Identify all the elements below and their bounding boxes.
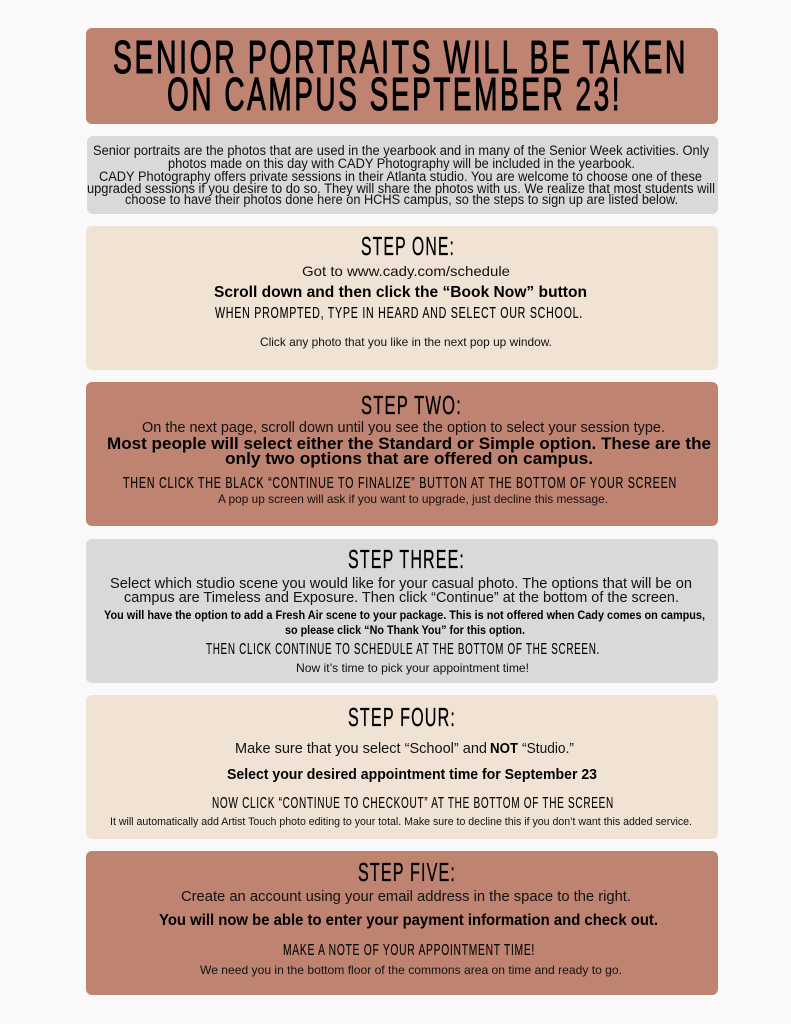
instruction: payment: You will now be able to enter your payment information and check out. [159,912,658,929]
intro text: photos made on this day with CADY Photography will be included in the yearbook. [168,156,635,171]
note: click photo: Click any photo that you like in the next pop up window. [260,335,552,349]
title banner [86,28,718,124]
instruction: book now: Scroll down and then click the “Book Now” button [214,284,587,301]
heading: step one: STEP ONE: [361,231,455,261]
instruction: studio scene: campus are Timeless and Exposure. Then click “Continue” at the bottom of the screen. [124,590,679,606]
intro text: upgraded sessions if you desire to do so. They will share the photos with us. We realize that most students will [87,181,715,196]
panel: step four [86,695,718,839]
instruction: appointment date: Select your desired appointment time for September 23 [227,766,597,783]
instruction: standard or simple: only two options that are offered on campus. [225,449,593,468]
instruction: standard or simple: Most people will select either the Standard or Simple option. These are the [107,434,711,453]
instruction: school not studio: Make sure that you select “School” and [235,741,487,757]
intro text: Senior portraits are the photos that are used in the yearbook and in many of the Senior Week activities. Only [93,143,709,158]
panel: step one [86,226,718,370]
panel: step two [86,382,718,526]
instruction: website: Got to www.cady.com/schedule [302,263,510,279]
heading: step three: STEP THREE: [348,544,465,574]
instruction: type heard: WHEN PROMPTED, TYPE IN HEARD AND SELECT OUR SCHOOL. [215,305,583,322]
instruction: studio scene [110,576,692,606]
instruction: create account: Create an account using your email address in the space to the right. [181,889,631,905]
instruction: school not studio: NOT [490,741,518,757]
note: decline upgrade: A pop up screen will ask if you want to upgrade, just decline this message. [218,492,608,506]
heading: step two: STEP TWO: [361,390,462,420]
panel: step three [86,539,718,683]
instruction: fresh air: You will have the option to add a Fresh Air scene to your package. This is not offered when Cady comes on campus, [104,610,705,622]
intro text [87,143,715,207]
instruction: session type: On the next page, scroll down until you see the option to select your session type. [142,420,665,436]
note: appointment time: Now it’s time to pick your appointment time! [296,661,529,675]
note: artist touch: It will automatically add Artist Touch photo editing to your total. Make sure to decline this if you don’t want this added service. [110,816,692,828]
intro text: CADY Photography offers private sessions in their Atlanta studio. You are welcome to choose one of these [99,169,702,184]
instruction: studio scene: Select which studio scene you would like for your casual photo. The options that will be on [110,576,692,592]
note: commons area: We need you in the bottom floor of the commons area on time and ready to go. [200,963,622,977]
heading: step four: STEP FOUR: [348,702,456,732]
instruction: school not studio: “Studio.” [522,741,574,757]
panel: introduction [87,136,718,214]
heading: step five: STEP FIVE: [358,857,456,887]
instruction: fresh air [104,610,705,637]
instruction: fresh air: so please click “No Thank You” for this option. [285,625,525,637]
instruction: standard or simple [107,434,711,468]
instruction: note time: MAKE A NOTE OF YOUR APPOINTMENT TIME! [283,942,535,959]
intro text: choose to have their photos done here on HCHS campus, so the steps to sign up are listed below. [125,192,678,207]
panel: step five [86,851,718,995]
